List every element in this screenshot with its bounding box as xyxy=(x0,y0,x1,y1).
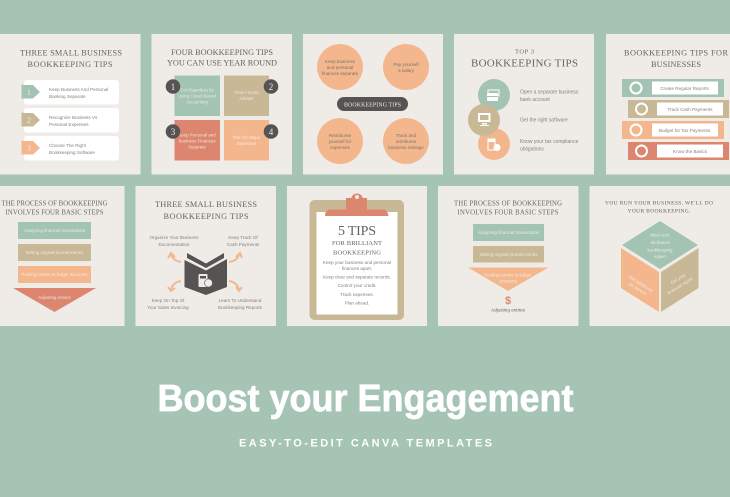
subtitle: EASY-TO-EDIT CANVA TEMPLATES xyxy=(239,438,492,450)
tip tile 2: Find A Good xyxy=(234,90,259,95)
tip tile 4: Expenses xyxy=(237,141,257,146)
tip row 2 xyxy=(22,108,119,132)
tip tile 3: Keep Personal and xyxy=(178,132,216,138)
cube right face: Get your xyxy=(670,272,687,285)
step 2: Writing original journal entries xyxy=(26,250,84,255)
labels around book: Learn To Understand xyxy=(219,298,262,303)
tip row 3: Bookkeeping Software xyxy=(49,150,95,155)
circle tip 3 xyxy=(317,118,363,164)
bar: budget for tax payments xyxy=(622,121,724,139)
tip tile 3 xyxy=(174,120,220,160)
cube left face: tax service xyxy=(628,281,648,297)
step 2 xyxy=(473,246,544,262)
icon circle: tax document xyxy=(478,128,510,160)
tips list: Keep clear and separate records. xyxy=(323,274,391,280)
tip row 2: Recognize Business Vs xyxy=(49,115,98,120)
heading: three small business tips xyxy=(155,200,257,221)
heading: four bookkeeping tips: YOU CAN USE YEAR ROUND xyxy=(167,58,277,68)
circle tip 4: business mileage xyxy=(388,145,424,150)
tips list: finances apart. xyxy=(342,266,372,271)
heading: process of bookkeeping xyxy=(454,200,562,216)
circle tip 3: expenses xyxy=(330,145,351,150)
cube top face: Meet your xyxy=(650,232,670,238)
panel: process four steps right xyxy=(438,186,578,326)
heading: you run your business: YOUR BOOKKEEPING. xyxy=(628,208,691,214)
tip row 2: 2 xyxy=(27,116,31,125)
tip row 1: 1 xyxy=(27,88,31,97)
heading: three small business tips xyxy=(20,48,122,69)
cube left face: Add additional xyxy=(628,274,654,293)
tips list: Track expenses. xyxy=(340,292,374,297)
panel: cube xyxy=(590,186,730,326)
heading: tips for businesses: BUSINESSES xyxy=(651,60,701,69)
center pill label xyxy=(337,97,408,111)
cube top face xyxy=(622,221,698,269)
tip list: bank account xyxy=(520,97,550,103)
circle tip 1: and personal xyxy=(327,65,353,70)
circle tip 3: Reimburse xyxy=(329,133,352,138)
tip list: obligations xyxy=(520,146,544,152)
heading: top 3 bookkeeping tips: BOOKKEEPING TIPS xyxy=(471,58,578,70)
heading: 5 tips: BOOKKEEPING xyxy=(333,250,381,256)
badge numerals: 4 xyxy=(269,127,274,137)
tip tile 3: Business Finances xyxy=(179,138,216,144)
bar: know the basics: Know the Basics xyxy=(673,149,708,154)
clipboard board xyxy=(310,200,404,320)
tip tile 3: Separate xyxy=(188,144,206,150)
labels around book: Organize Your Business xyxy=(149,235,199,240)
heading: 5 tips: 5 TIPS xyxy=(338,224,376,239)
tips list: Control your credit. xyxy=(338,283,376,288)
step 1 xyxy=(473,224,544,241)
tip tile 1: Using Cloud-Based xyxy=(178,94,216,98)
heading: tips for businesses: BOOKKEEPING TIPS FOR xyxy=(624,48,728,58)
tip tile 2 xyxy=(224,76,269,116)
circle tip 4: Track and xyxy=(396,133,417,138)
clip hole xyxy=(355,195,359,199)
step 1: Analyzing financial transactions xyxy=(478,230,540,235)
panel: process four steps left xyxy=(0,186,124,326)
bar: know the basics xyxy=(628,142,729,160)
panel: clipboard five tips xyxy=(287,186,427,326)
cube top face: dedicated xyxy=(650,240,670,245)
step 3: Posting entries to ledger accounts xyxy=(21,272,88,277)
cube top face: bookkeeping xyxy=(648,248,673,252)
tip row 1 xyxy=(22,80,119,104)
cube top face: expert xyxy=(654,254,667,259)
step 3 funnel: accounts xyxy=(499,278,518,284)
heading: 5 tips xyxy=(332,224,382,256)
tip list xyxy=(520,90,579,152)
labels around book: Keep Track Of xyxy=(228,235,258,240)
heading: three small business tips: BOOKKEEPING TIPS xyxy=(28,60,113,69)
heading: four bookkeeping tips: FOUR BOOKKEEPING TIPS xyxy=(171,48,273,57)
badge numerals: 1 xyxy=(171,82,175,92)
step 3 funnel: Posting entries to ledger xyxy=(484,272,532,278)
tip tile 2: Adviser xyxy=(239,96,254,101)
cube right face xyxy=(661,248,698,312)
tip tile 1: Accounting xyxy=(186,100,208,104)
badge numerals xyxy=(171,82,274,137)
tip row 3: Choose The Right xyxy=(49,143,87,148)
heading: four bookkeeping tips xyxy=(167,48,277,68)
step 1: Analyzing financial transactions xyxy=(24,228,86,233)
icon: dollar: $ xyxy=(505,295,511,307)
bar: create regular reports: Create Regular Reports xyxy=(660,86,709,91)
labels around book xyxy=(147,235,263,310)
tip row 3 xyxy=(22,136,119,160)
labels around book: Bookkeeping Reports xyxy=(218,305,263,310)
heading: three small business tips: THREE SMALL BUSINESS xyxy=(155,200,257,209)
icon: open book xyxy=(184,253,227,295)
labels around book: Your Sales Invoicing xyxy=(147,305,189,310)
icon circle: monitor xyxy=(468,104,500,136)
icon circle: cards xyxy=(478,79,510,111)
heading: process of bookkeeping: THE PROCESS OF BOOKKEEPING xyxy=(2,200,108,208)
number badges xyxy=(166,79,278,139)
tips list: Plan ahead. xyxy=(345,300,369,306)
panel: bookkeeping tips circles xyxy=(303,34,443,174)
circle tip 1: finances separate xyxy=(322,71,359,76)
tip row 2: Personal Expenses xyxy=(49,122,89,127)
circle tip 2 xyxy=(383,44,429,90)
heading: three small business tips: BOOKKEEPING TIPS xyxy=(164,212,249,221)
labels around book: Documentation xyxy=(159,242,190,247)
tip tile 4: Plan for Major xyxy=(233,135,261,140)
badge numerals: 3 xyxy=(171,127,176,137)
heading: process of bookkeeping: THE PROCESS OF BOOKKEEPING xyxy=(454,200,562,208)
tip list: Open a separate business xyxy=(520,90,579,96)
circle tip 1 xyxy=(317,44,363,90)
circle tip 3: yourself for xyxy=(329,139,352,144)
bar: track cash payments xyxy=(628,100,729,118)
labels around book: Keep On Top Of xyxy=(152,298,185,303)
panel: top 3 tips xyxy=(454,34,594,174)
panel: three tips around book xyxy=(136,186,276,326)
arrows xyxy=(168,253,242,291)
heading: you run your business: YOU RUN YOUR BUSINESS. WE'LL DO xyxy=(605,200,713,206)
bar: budget for tax payments: Budget for Tax Payments xyxy=(659,128,711,133)
circle tip 2: Pay yourself xyxy=(393,62,419,67)
title: Boost your Engagement xyxy=(158,378,574,420)
tips list: Keep your business and personal xyxy=(323,260,391,265)
heading: you run your business xyxy=(605,200,713,214)
tip row 1: Banking Separate xyxy=(49,94,86,99)
heading: three small business tips: THREE SMALL BUSINESS xyxy=(20,48,122,58)
panel: three small business tips xyxy=(0,34,140,174)
tip list: Know your tax compliance xyxy=(520,139,579,145)
step 3 funnel xyxy=(468,268,548,291)
circle tip 1: Keep business xyxy=(325,59,356,64)
step 2: Writing original journal entries xyxy=(480,252,538,257)
tip row 1: Keep Business And Personal xyxy=(49,87,108,92)
heading: top 3 bookkeeping tips xyxy=(471,48,578,70)
circle tip 4 xyxy=(383,118,429,164)
clipboard clip xyxy=(325,194,388,216)
badge numerals: 2 xyxy=(269,82,273,92)
heading: 5 tips: FOR BRILLIANT xyxy=(332,240,382,247)
tip tile 1 xyxy=(174,76,220,116)
labels around book: Cash Payments xyxy=(227,242,260,247)
tip row 3: 3 xyxy=(27,144,31,153)
tip list: Get the right software xyxy=(520,118,568,124)
heading: process of bookkeeping xyxy=(2,200,108,216)
center pill label: BOOKKEEPING TIPS xyxy=(344,102,401,108)
heading: top 3 bookkeeping tips: TOP 3 xyxy=(515,48,534,56)
cube right face: financial report xyxy=(667,276,694,295)
circle tip 2: a salary xyxy=(398,68,415,73)
bar: create regular reports xyxy=(622,79,724,97)
heading: tips for businesses xyxy=(624,48,728,69)
tip tile 4 xyxy=(224,120,269,160)
cube left face xyxy=(621,248,659,312)
heading: process of bookkeeping: INVOLVES FOUR BASIC STEPS xyxy=(6,210,104,216)
step 4 funnel: Adjusting entries xyxy=(38,295,72,300)
tips list xyxy=(323,260,391,306)
circle tip 4: reimburse xyxy=(396,139,417,144)
step 4 label: Adjusting entries xyxy=(491,308,526,312)
bar: track cash payments: Track Cash Payments xyxy=(667,107,713,112)
panel: bookkeeping tips for businesses xyxy=(606,34,730,174)
tip tile 1: Cut Paperless by xyxy=(180,88,215,92)
panel: four bookkeeping tips xyxy=(152,34,292,174)
heading: process of bookkeeping: INVOLVES FOUR BASIC STEPS xyxy=(458,210,559,216)
